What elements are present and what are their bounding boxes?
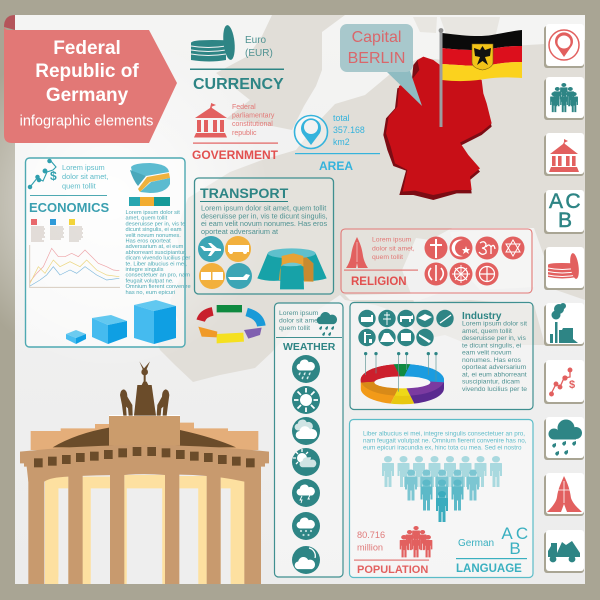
panel: transport: TRANSPORT (200, 186, 289, 202)
segmented ring chart (198, 309, 262, 343)
panel: weather: WEATHER (283, 341, 336, 353)
area value: total (333, 113, 350, 123)
area value: 357.168 (333, 125, 365, 135)
economics intro text: Lorem ipsum (62, 163, 105, 172)
icon: growth chart with dollar: $ (50, 169, 57, 183)
government type: republic (232, 130, 257, 137)
economics body text: has no, eum epicuri (126, 290, 175, 296)
government type (232, 104, 275, 137)
religion text: Lorem ipsum (372, 236, 412, 244)
icon: growth dollar (550, 368, 575, 396)
gate metopes (34, 447, 255, 467)
line chart (30, 245, 120, 287)
population text: nam feugait volutpat ne. Omnium fierent convenire has no, (363, 438, 527, 444)
panel: population and language (350, 420, 533, 578)
transport text: oporteat adversarium at (201, 227, 278, 236)
economics body text: dicunt singulis, ei eam (126, 227, 182, 233)
economics body text: feugait volutpat ne. (126, 278, 174, 284)
economics body text: Lorem ipsum dolor sit (126, 210, 180, 216)
icon: coat of arms (472, 44, 493, 70)
quadriga sculpture (120, 361, 169, 416)
economics body text: Has eros oporteat (126, 238, 171, 244)
currency block: CURRENCY (193, 76, 284, 93)
population text (363, 430, 527, 452)
religion text: dolor sit amet, (372, 246, 415, 252)
panel: weather (274, 303, 343, 577)
title ribbon (4, 15, 177, 143)
title text: Republic of (35, 61, 139, 82)
religion symbols (424, 236, 524, 286)
3D pie chart (130, 163, 170, 193)
area block (294, 113, 380, 173)
icon: rain cloud (548, 420, 582, 456)
transport text (201, 204, 328, 236)
weather icons (292, 355, 320, 574)
panel: transport (194, 178, 334, 294)
industry text: amet, quem tollit (462, 328, 512, 335)
icon: location pin (549, 30, 579, 60)
panel: population and language: LANGUAGE (456, 563, 522, 575)
population text: eum epicuri iracundia ex, hinc tota cu mea. Sed ei nostro (363, 444, 522, 452)
icon: praying hands (346, 237, 368, 268)
panel: religion: RELIGION (351, 276, 407, 288)
icon: rain cloud (317, 312, 337, 336)
economics body text: amet, quem tollit (126, 216, 168, 222)
industry text: deseruisse per in, vis (462, 335, 526, 342)
industry text (462, 320, 527, 393)
icon: growth chart with dollar (28, 159, 57, 189)
icon: alphabet: C (565, 190, 581, 213)
language name: German (458, 538, 494, 549)
economics body text: Omnium fierent convenire (126, 284, 191, 290)
area value (333, 113, 365, 147)
economics intro text: dolor sit amet, (62, 172, 108, 181)
3D donut chart (360, 352, 444, 404)
icon: government building (549, 139, 579, 172)
population value (357, 530, 385, 552)
icon: map pin (294, 116, 328, 148)
bottom frame band (0, 584, 600, 600)
icon: dump truck (548, 541, 580, 562)
icon: coins (548, 253, 580, 279)
gate passage interiors (45, 475, 244, 584)
icon: praying hands (547, 476, 582, 512)
weather text: dolor sit amet, (279, 318, 322, 324)
capital callout (340, 24, 422, 106)
icon: growth dollar: $ (569, 379, 575, 391)
currency block (190, 25, 284, 93)
title text: infographic elements (20, 114, 153, 130)
title text: Germany (46, 85, 129, 106)
icon: coins (191, 25, 236, 62)
transport text: Lorem ipsum dolor sit amet, quem tollit (201, 204, 326, 212)
industry text: Lorem ipsum dolor sit (462, 320, 527, 328)
gate central block (109, 416, 180, 446)
panel: economics: ECONOMICS (29, 200, 110, 215)
industry text: vivendo lucilius per te (462, 386, 527, 393)
government block (192, 103, 279, 162)
industry text: suscipiantur, dicam (462, 378, 520, 386)
economics body text: abhorreant suscipiantur, (126, 250, 187, 256)
economics intro text: quem tollit (62, 182, 96, 190)
icon: alphabet: A (549, 190, 563, 213)
religion text: quem tollit (372, 254, 403, 261)
panel: economics (26, 158, 191, 347)
icon: train (199, 263, 225, 289)
icon: bus (225, 236, 251, 262)
industry title: Industry (462, 311, 502, 322)
language letters (501, 524, 528, 558)
icon: alphabet: B (558, 209, 572, 232)
religion text (372, 236, 415, 261)
capital callout: Capital (352, 29, 401, 46)
capital callout: BERLIN (348, 50, 405, 67)
title text: Federal (53, 38, 121, 59)
economics body text: consectetuer an pro, nam (126, 273, 190, 279)
industry icons (358, 310, 454, 346)
industry text: te dicunt singulis, ei (462, 342, 522, 349)
chart legend (31, 219, 83, 241)
industry text: nonumes. Has eros (462, 357, 522, 364)
panel: population and language: POPULATION (357, 564, 428, 576)
economics body text: te. Liber albucius ei mei, (126, 261, 187, 267)
economics body text: adversarium at, ei eum (126, 244, 184, 250)
panel: industry (349, 302, 534, 410)
economics body text: dicam vivendo lucilius per (126, 256, 190, 262)
chart pins (364, 352, 438, 392)
German flag (439, 28, 522, 127)
population value: 80.716 (357, 530, 385, 540)
transport text: ei eam velit novum nonumes. Has eros (201, 219, 327, 228)
currency name: Euro (245, 35, 267, 46)
area value: km2 (333, 137, 350, 147)
icon: people group (550, 83, 578, 112)
chart base strip (129, 197, 170, 206)
currency name: (EUR) (245, 48, 273, 59)
government type: constitutional (232, 121, 273, 128)
industry text: oporteat adversarium (462, 364, 527, 371)
panel: religion (341, 229, 532, 293)
gate attic (31, 416, 258, 450)
3D cubes bar chart (66, 300, 176, 344)
population pyramid (382, 456, 502, 522)
map of Germany (383, 57, 492, 200)
sidebar icons (544, 24, 584, 573)
weather text (279, 310, 322, 332)
government type: Federal (232, 104, 256, 111)
industry text: at, ei eum abhorreant (462, 371, 527, 378)
icon: parliament building (194, 103, 227, 138)
title text (20, 38, 153, 130)
economics intro text (62, 163, 108, 190)
population value: million (357, 542, 383, 552)
weather text: Lorem ipsum (279, 310, 319, 317)
Brandenburg Gate (20, 361, 269, 584)
population text: Liber albucius ei mei, integre singulis consectetuer an pro, (363, 430, 525, 438)
area block: AREA (319, 159, 353, 173)
icon: airplane (198, 236, 224, 262)
gate columns (28, 474, 261, 584)
economics body text: integre singulis (126, 267, 164, 273)
gate entablature (20, 445, 269, 482)
icon: people group (400, 526, 432, 557)
icon: factory (550, 303, 578, 343)
economics body text: velit novum nonumes. (126, 233, 181, 239)
industry text: eam velit novum (462, 350, 512, 356)
weather text: quem tollit (279, 325, 310, 332)
economics body text: deseruisse per in, vis te (126, 221, 185, 227)
language letters: C (516, 524, 528, 543)
icon: alphabet (549, 190, 581, 232)
language letters: B (509, 539, 521, 558)
economics body text (126, 210, 191, 296)
language letters: A (501, 524, 513, 543)
transport text: deseruisse per in, vis te dicunt singulis, (201, 212, 328, 220)
icon: ship (226, 263, 252, 289)
government block: GOVERNMENT (192, 148, 279, 162)
gate dark pediment (53, 428, 236, 447)
currency name (245, 35, 273, 59)
segmented bowl chart (257, 248, 327, 289)
government type: parliamentary (232, 112, 275, 120)
